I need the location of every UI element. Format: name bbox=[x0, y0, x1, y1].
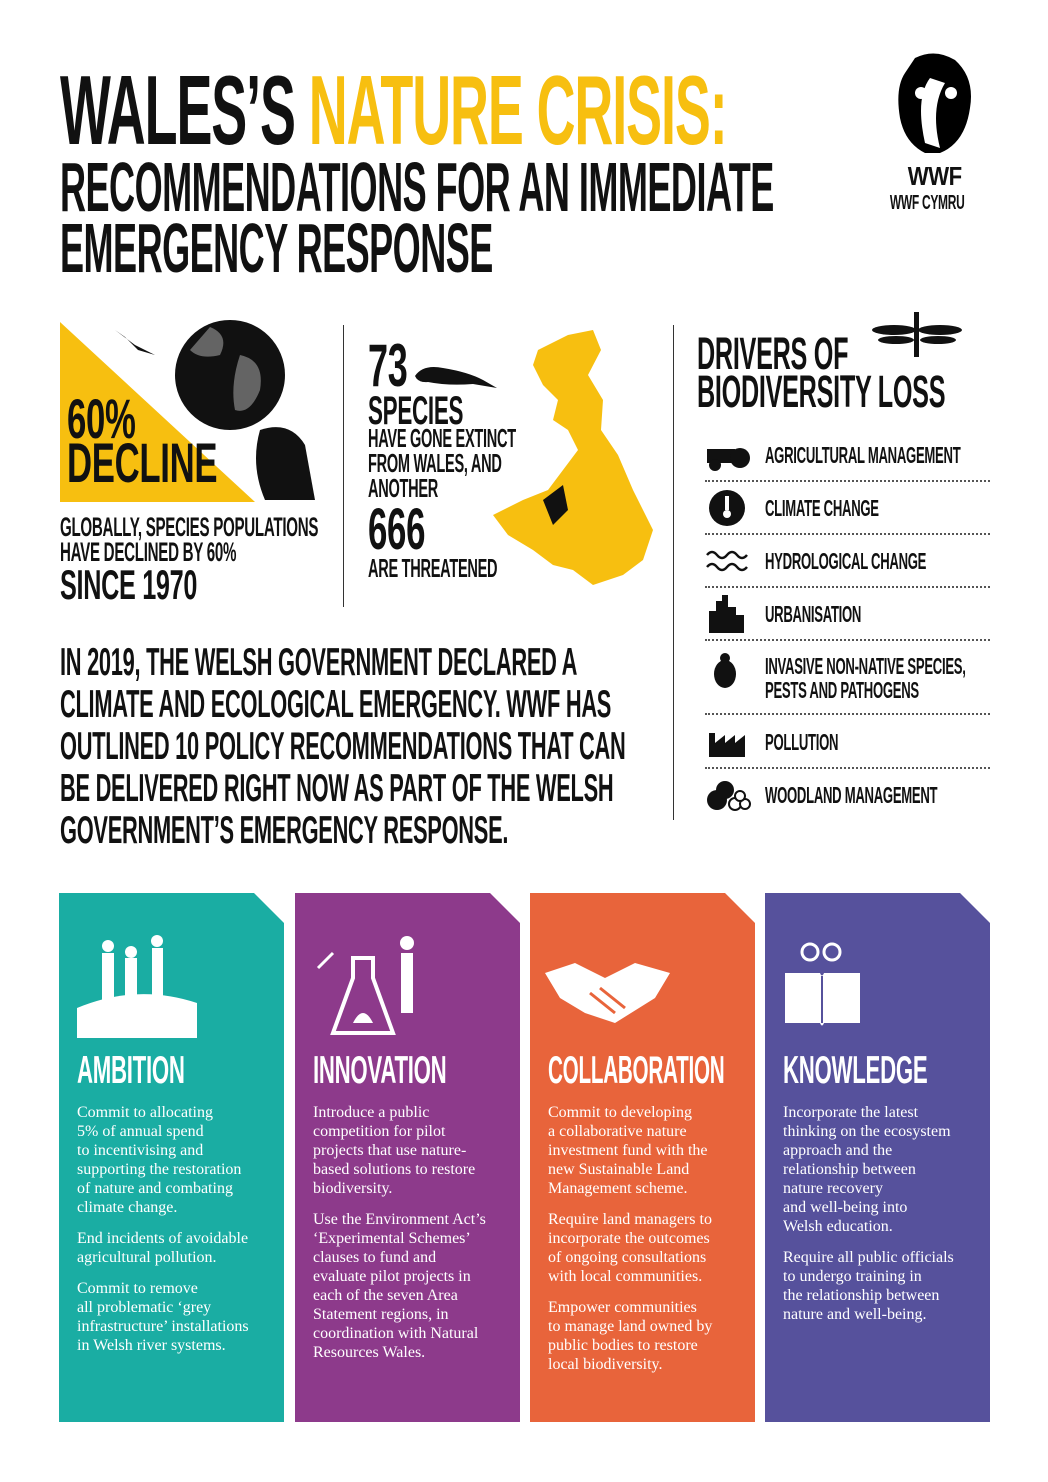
text: knowledge: nature recovery bbox=[783, 1180, 883, 1197]
text: knowledge: Require all public officials bbox=[783, 1249, 954, 1266]
panel: innovation bbox=[295, 893, 520, 1422]
logo: WWF panda: WWF bbox=[908, 161, 962, 191]
text: innovation: based solutions to restore bbox=[313, 1161, 475, 1178]
text: knowledge: Welsh education. bbox=[783, 1218, 893, 1235]
text: innovation: Use the Environment Act’s bbox=[313, 1211, 486, 1228]
driver: invasive species: INVASIVE NON-NATIVE SPECIES, bbox=[765, 653, 966, 679]
text: ambition: Commit to remove bbox=[77, 1280, 198, 1297]
text: collaboration: of ongoing consultations bbox=[548, 1249, 706, 1266]
text: collaboration: Management scheme. bbox=[548, 1180, 688, 1197]
text: innovation: ‘Experimental Schemes’ bbox=[313, 1230, 471, 1247]
text: collaboration: with local communities. bbox=[548, 1268, 702, 1285]
driver: agricultural: AGRICULTURAL MANAGEMENT bbox=[765, 442, 960, 468]
title: EMERGENCY RESPONSE bbox=[60, 209, 493, 287]
icon: people on hill bbox=[77, 935, 197, 1038]
statement paragraph: OUTLINED 10 POLICY RECOMMENDATIONS THAT CAN bbox=[60, 725, 626, 768]
driver: pollution: POLLUTION bbox=[765, 729, 838, 755]
text: innovation: biodiversity. bbox=[313, 1180, 392, 1197]
icon: thermometer bbox=[709, 490, 745, 526]
logo: WWF panda: WWF CYMRU bbox=[890, 192, 964, 214]
stat: 73 species extinct: ANOTHER bbox=[368, 473, 438, 503]
text: knowledge: the relationship between bbox=[783, 1287, 939, 1304]
text: collaboration: incorporate the outcomes bbox=[548, 1230, 710, 1247]
list: drivers bbox=[706, 442, 966, 811]
stat: 73 species extinct: ARE THREATENED bbox=[368, 553, 497, 583]
stat: 73 species extinct: 73 bbox=[368, 332, 407, 399]
text: ambition: supporting the restoration bbox=[77, 1161, 241, 1178]
heading: drivers of biodiversity loss: DRIVERS OF bbox=[697, 328, 848, 379]
text: ambition: agricultural pollution. bbox=[77, 1249, 217, 1266]
driver: climate: CLIMATE CHANGE bbox=[765, 495, 879, 521]
heading: drivers of biodiversity loss: BIODIVERSITY LOSS bbox=[697, 366, 945, 417]
statement paragraph: IN 2019, THE WELSH GOVERNMENT DECLARED A bbox=[60, 641, 577, 684]
text: collaboration bbox=[548, 1106, 712, 1372]
driver: invasive species bbox=[765, 653, 966, 703]
text: knowledge: thinking on the ecosystem bbox=[783, 1123, 951, 1140]
text: collaboration: investment fund with the bbox=[548, 1142, 708, 1159]
panel: ambition bbox=[59, 893, 284, 1422]
stat: 73 species extinct bbox=[368, 330, 653, 585]
text: collaboration: new Sustainable Land bbox=[548, 1161, 689, 1178]
text: innovation: competition for pilot bbox=[313, 1123, 445, 1140]
stat: 60% decline: GLOBALLY, SPECIES POPULATIONS bbox=[60, 512, 318, 542]
driver: hydrological: HYDROLOGICAL CHANGE bbox=[765, 548, 926, 574]
text: innovation bbox=[313, 1106, 486, 1357]
text: collaboration: public bodies to restore bbox=[548, 1337, 698, 1354]
panel: knowledge bbox=[765, 893, 990, 1422]
statement paragraph: BE DELIVERED RIGHT NOW AS PART OF THE WELSH bbox=[60, 767, 613, 810]
heading: drivers of biodiversity loss bbox=[697, 312, 962, 417]
logo: WWF panda bbox=[890, 54, 971, 214]
icon: tractor bbox=[707, 448, 750, 471]
text: knowledge: Incorporate the latest bbox=[783, 1104, 918, 1121]
text: knowledge: to undergo training in bbox=[783, 1268, 922, 1285]
text: ambition: all problematic ‘grey bbox=[77, 1299, 211, 1316]
stat: 60% decline: DECLINE bbox=[67, 431, 217, 494]
heading: collaboration: COLLABORATION bbox=[548, 1049, 724, 1092]
icon: handshake bbox=[545, 963, 670, 1023]
icon: waves bbox=[706, 550, 748, 572]
stat: 73 species extinct: 666 bbox=[368, 497, 425, 562]
text: innovation: evaluate pilot projects in bbox=[313, 1268, 471, 1285]
text: knowledge: nature and well-being. bbox=[783, 1306, 926, 1323]
text: innovation: clauses to fund and bbox=[313, 1249, 436, 1266]
panel: collaboration bbox=[530, 893, 755, 1422]
text: innovation: coordination with Natural bbox=[313, 1325, 478, 1342]
icon: otter bbox=[415, 367, 497, 388]
stat: 60% decline: HAVE DECLINED BY 60% bbox=[60, 537, 236, 567]
icon: globe, bird and gorilla bbox=[60, 320, 315, 502]
text: knowledge bbox=[783, 1106, 954, 1322]
text: ambition: to incentivising and bbox=[77, 1142, 203, 1159]
text: innovation: Introduce a public bbox=[313, 1104, 429, 1121]
icon: dragonfly bbox=[872, 312, 962, 357]
text: ambition: of nature and combating bbox=[77, 1180, 233, 1197]
text: ambition: End incidents of avoidable bbox=[77, 1230, 248, 1247]
text: collaboration: local biodiversity. bbox=[548, 1356, 662, 1373]
icon: beetle bbox=[714, 653, 736, 688]
text: knowledge: approach and the bbox=[783, 1142, 892, 1159]
text: collaboration: Commit to developing bbox=[548, 1104, 692, 1121]
title: WALES’S NATURE CRISIS: bbox=[60, 55, 727, 165]
text: ambition: Commit to allocating bbox=[77, 1104, 213, 1121]
driver: invasive species: PESTS AND PATHOGENS bbox=[765, 677, 919, 703]
text: knowledge: and well-being into bbox=[783, 1199, 907, 1216]
heading: innovation: INNOVATION bbox=[313, 1049, 446, 1092]
map of Wales with butterfly bbox=[493, 330, 653, 585]
stat: 60% decline: SINCE 1970 bbox=[60, 561, 197, 608]
icon: city bbox=[709, 595, 744, 633]
stat: 73 species extinct: HAVE GONE EXTINCT bbox=[368, 423, 516, 453]
text: knowledge: relationship between bbox=[783, 1161, 916, 1178]
text: innovation: projects that use nature- bbox=[313, 1142, 466, 1159]
stat: 60% decline: 60% bbox=[67, 387, 136, 450]
driver: urbanisation: URBANISATION bbox=[765, 601, 861, 627]
statement paragraph: GOVERNMENT’S EMERGENCY RESPONSE. bbox=[60, 809, 508, 852]
stat: 73 species extinct: SPECIES bbox=[368, 389, 463, 433]
text: ambition: climate change. bbox=[77, 1199, 177, 1216]
text: innovation: Statement regions, in bbox=[313, 1306, 449, 1323]
statement paragraph bbox=[60, 641, 626, 852]
icon: factory bbox=[709, 733, 745, 757]
text: ambition: infrastructure’ installations bbox=[77, 1318, 249, 1335]
text: innovation: each of the seven Area bbox=[313, 1287, 458, 1304]
statement paragraph: CLIMATE AND ECOLOGICAL EMERGENCY. WWF HAS bbox=[60, 683, 611, 726]
stat: 73 species extinct: FROM WALES, AND bbox=[368, 448, 502, 478]
text: ambition bbox=[77, 1106, 248, 1354]
stat: 60% decline bbox=[60, 320, 318, 608]
title: RECOMMENDATIONS FOR AN IMMEDIATE bbox=[60, 148, 774, 226]
text: collaboration: a collaborative nature bbox=[548, 1123, 687, 1140]
icon: logs bbox=[707, 781, 751, 811]
text: ambition: in Welsh river systems. bbox=[77, 1337, 226, 1354]
driver: woodland: WOODLAND MANAGEMENT bbox=[765, 782, 937, 808]
text: innovation: Resources Wales. bbox=[313, 1344, 425, 1361]
title bbox=[60, 55, 774, 287]
text: ambition: 5% of annual spend bbox=[77, 1123, 204, 1140]
heading: knowledge: KNOWLEDGE bbox=[783, 1049, 927, 1092]
icon: flask and scientist bbox=[317, 936, 414, 1035]
text: collaboration: Require land managers to bbox=[548, 1211, 712, 1228]
icon: book and glasses bbox=[785, 942, 860, 1026]
text: collaboration: Empower communities bbox=[548, 1299, 697, 1316]
text: collaboration: to manage land owned by bbox=[548, 1318, 712, 1335]
heading: ambition: AMBITION bbox=[77, 1049, 185, 1092]
